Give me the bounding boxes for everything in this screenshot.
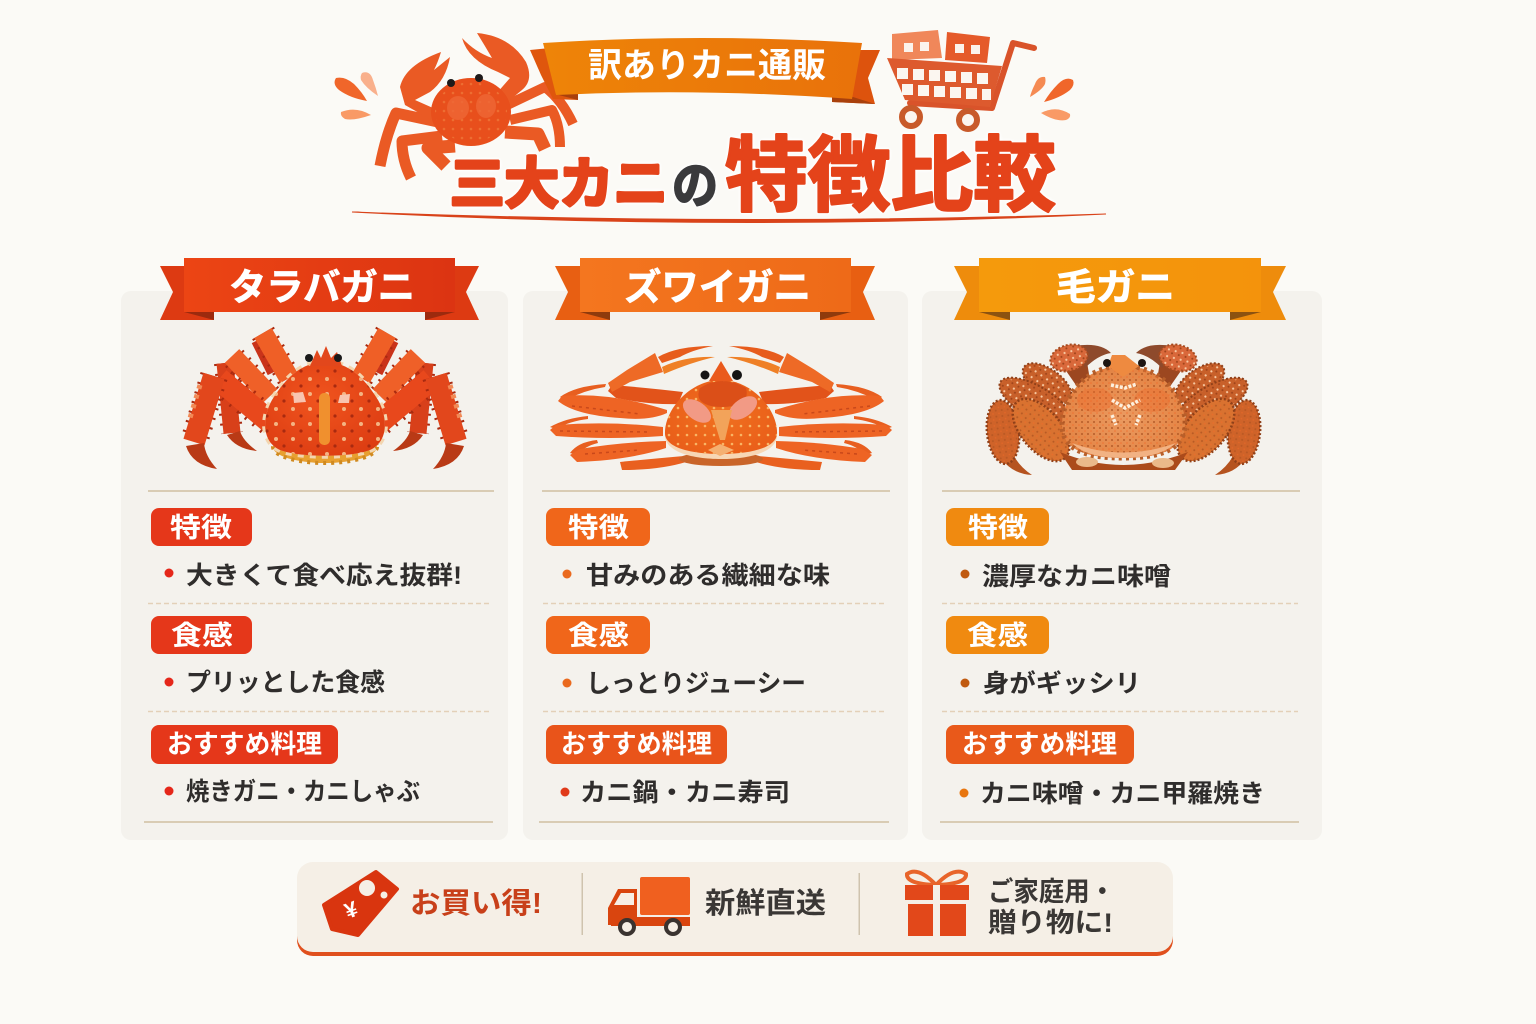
- footer bar: [297, 862, 1173, 956]
- panel: 毛ガニ: [922, 258, 1322, 840]
- icon: left sparks: [335, 72, 378, 120]
- icon: gift box: [905, 872, 969, 936]
- tag: おすすめ料理: おすすめ料理: [167, 729, 322, 759]
- item: 食感: プリッとした食感: [186, 669, 385, 697]
- tag: 食感: [151, 616, 252, 654]
- ribbon heading: [954, 258, 1286, 320]
- tag: 食感: 食感: [967, 621, 1028, 651]
- item: 食感: 身がギッシリ: [983, 669, 1141, 698]
- ribbon heading: [160, 258, 479, 320]
- card background: [922, 291, 1322, 840]
- illustration: 毛ガニ: [984, 341, 1263, 475]
- text: お買い得!: お買い得!: [410, 887, 542, 920]
- icon: price tag: ¥: [341, 896, 362, 924]
- tag: 食感: 食感: [171, 621, 233, 651]
- tag: 食感: [946, 616, 1049, 654]
- banner: 訳ありカニ通販: 訳ありカニ通販: [588, 47, 826, 85]
- title: 三大カニの特徴比較: [450, 131, 1056, 222]
- header: [335, 30, 1106, 223]
- divider: [148, 490, 494, 492]
- tag: 食感: [546, 616, 650, 654]
- text: 新鮮直送: 新鮮直送: [705, 887, 826, 920]
- tag: おすすめ料理: [546, 725, 727, 764]
- card background: [523, 291, 908, 840]
- text: ご家庭用・贈り物に!: ご家庭用・: [988, 876, 1115, 907]
- tag: 特徴: [546, 508, 650, 546]
- item: 特徴: 甘みのある繊細な味: [586, 562, 830, 590]
- title underline: [352, 212, 1106, 223]
- item: 特徴: 濃厚なカニ味噌: [982, 563, 1171, 591]
- ribbon heading: [555, 258, 875, 320]
- icon: right sparks: [1030, 77, 1074, 120]
- tag: 特徴: [946, 508, 1049, 546]
- tag: おすすめ料理: おすすめ料理: [962, 729, 1117, 759]
- text: ご家庭用・贈り物に!: [988, 876, 1115, 938]
- item: おすすめ料理: カニ鍋・カニ寿司: [580, 779, 790, 807]
- icon: header crab: [380, 33, 573, 178]
- tag: 特徴: [151, 508, 252, 546]
- tag: おすすめ料理: [151, 725, 338, 764]
- item: おすすめ料理: 焼きガニ・カニしゃぶ: [186, 778, 420, 806]
- tag: おすすめ料理: おすすめ料理: [561, 729, 712, 759]
- divider: [942, 490, 1300, 492]
- illustration: タラバガニ: [186, 333, 464, 469]
- panel: タラバガニ: [121, 258, 508, 840]
- tag: 食感: 食感: [568, 621, 629, 651]
- tag: 特徴: 特徴: [968, 513, 1028, 543]
- divider: [542, 490, 890, 492]
- icon: delivery truck: [608, 877, 690, 934]
- item: 食感: しっとりジューシー: [586, 670, 806, 698]
- icon: price tag: [324, 872, 397, 935]
- footer background: [297, 862, 1173, 956]
- tag: おすすめ料理: [946, 725, 1134, 764]
- tag: 特徴: 特徴: [568, 513, 629, 543]
- icon: shopping cart: [887, 30, 1034, 129]
- title: 三大カニの特徴比較: 三大カニ: [450, 153, 668, 215]
- ribbon heading: 毛ガニ: [1056, 267, 1175, 308]
- ribbon heading: タラバガニ: [229, 267, 415, 308]
- illustration: ズワイガニ: [550, 346, 892, 470]
- panel: ズワイガニ: [523, 258, 908, 840]
- title: 三大カニの特徴比較: 特徴比較: [725, 131, 1056, 222]
- item: おすすめ料理: カニ味噌・カニ甲羅焼き: [980, 780, 1265, 808]
- banner: 訳ありカニ通販: [530, 38, 880, 104]
- ribbon heading: ズワイガニ: [624, 267, 811, 308]
- card background: [121, 291, 508, 840]
- tag: 特徴: 特徴: [170, 513, 232, 543]
- text: ご家庭用・贈り物に!: 贈り物に!: [988, 908, 1113, 938]
- title: 三大カニの特徴比較: の: [672, 158, 718, 214]
- item: 特徴: 大きくて食べ応え抜群!: [186, 562, 462, 590]
